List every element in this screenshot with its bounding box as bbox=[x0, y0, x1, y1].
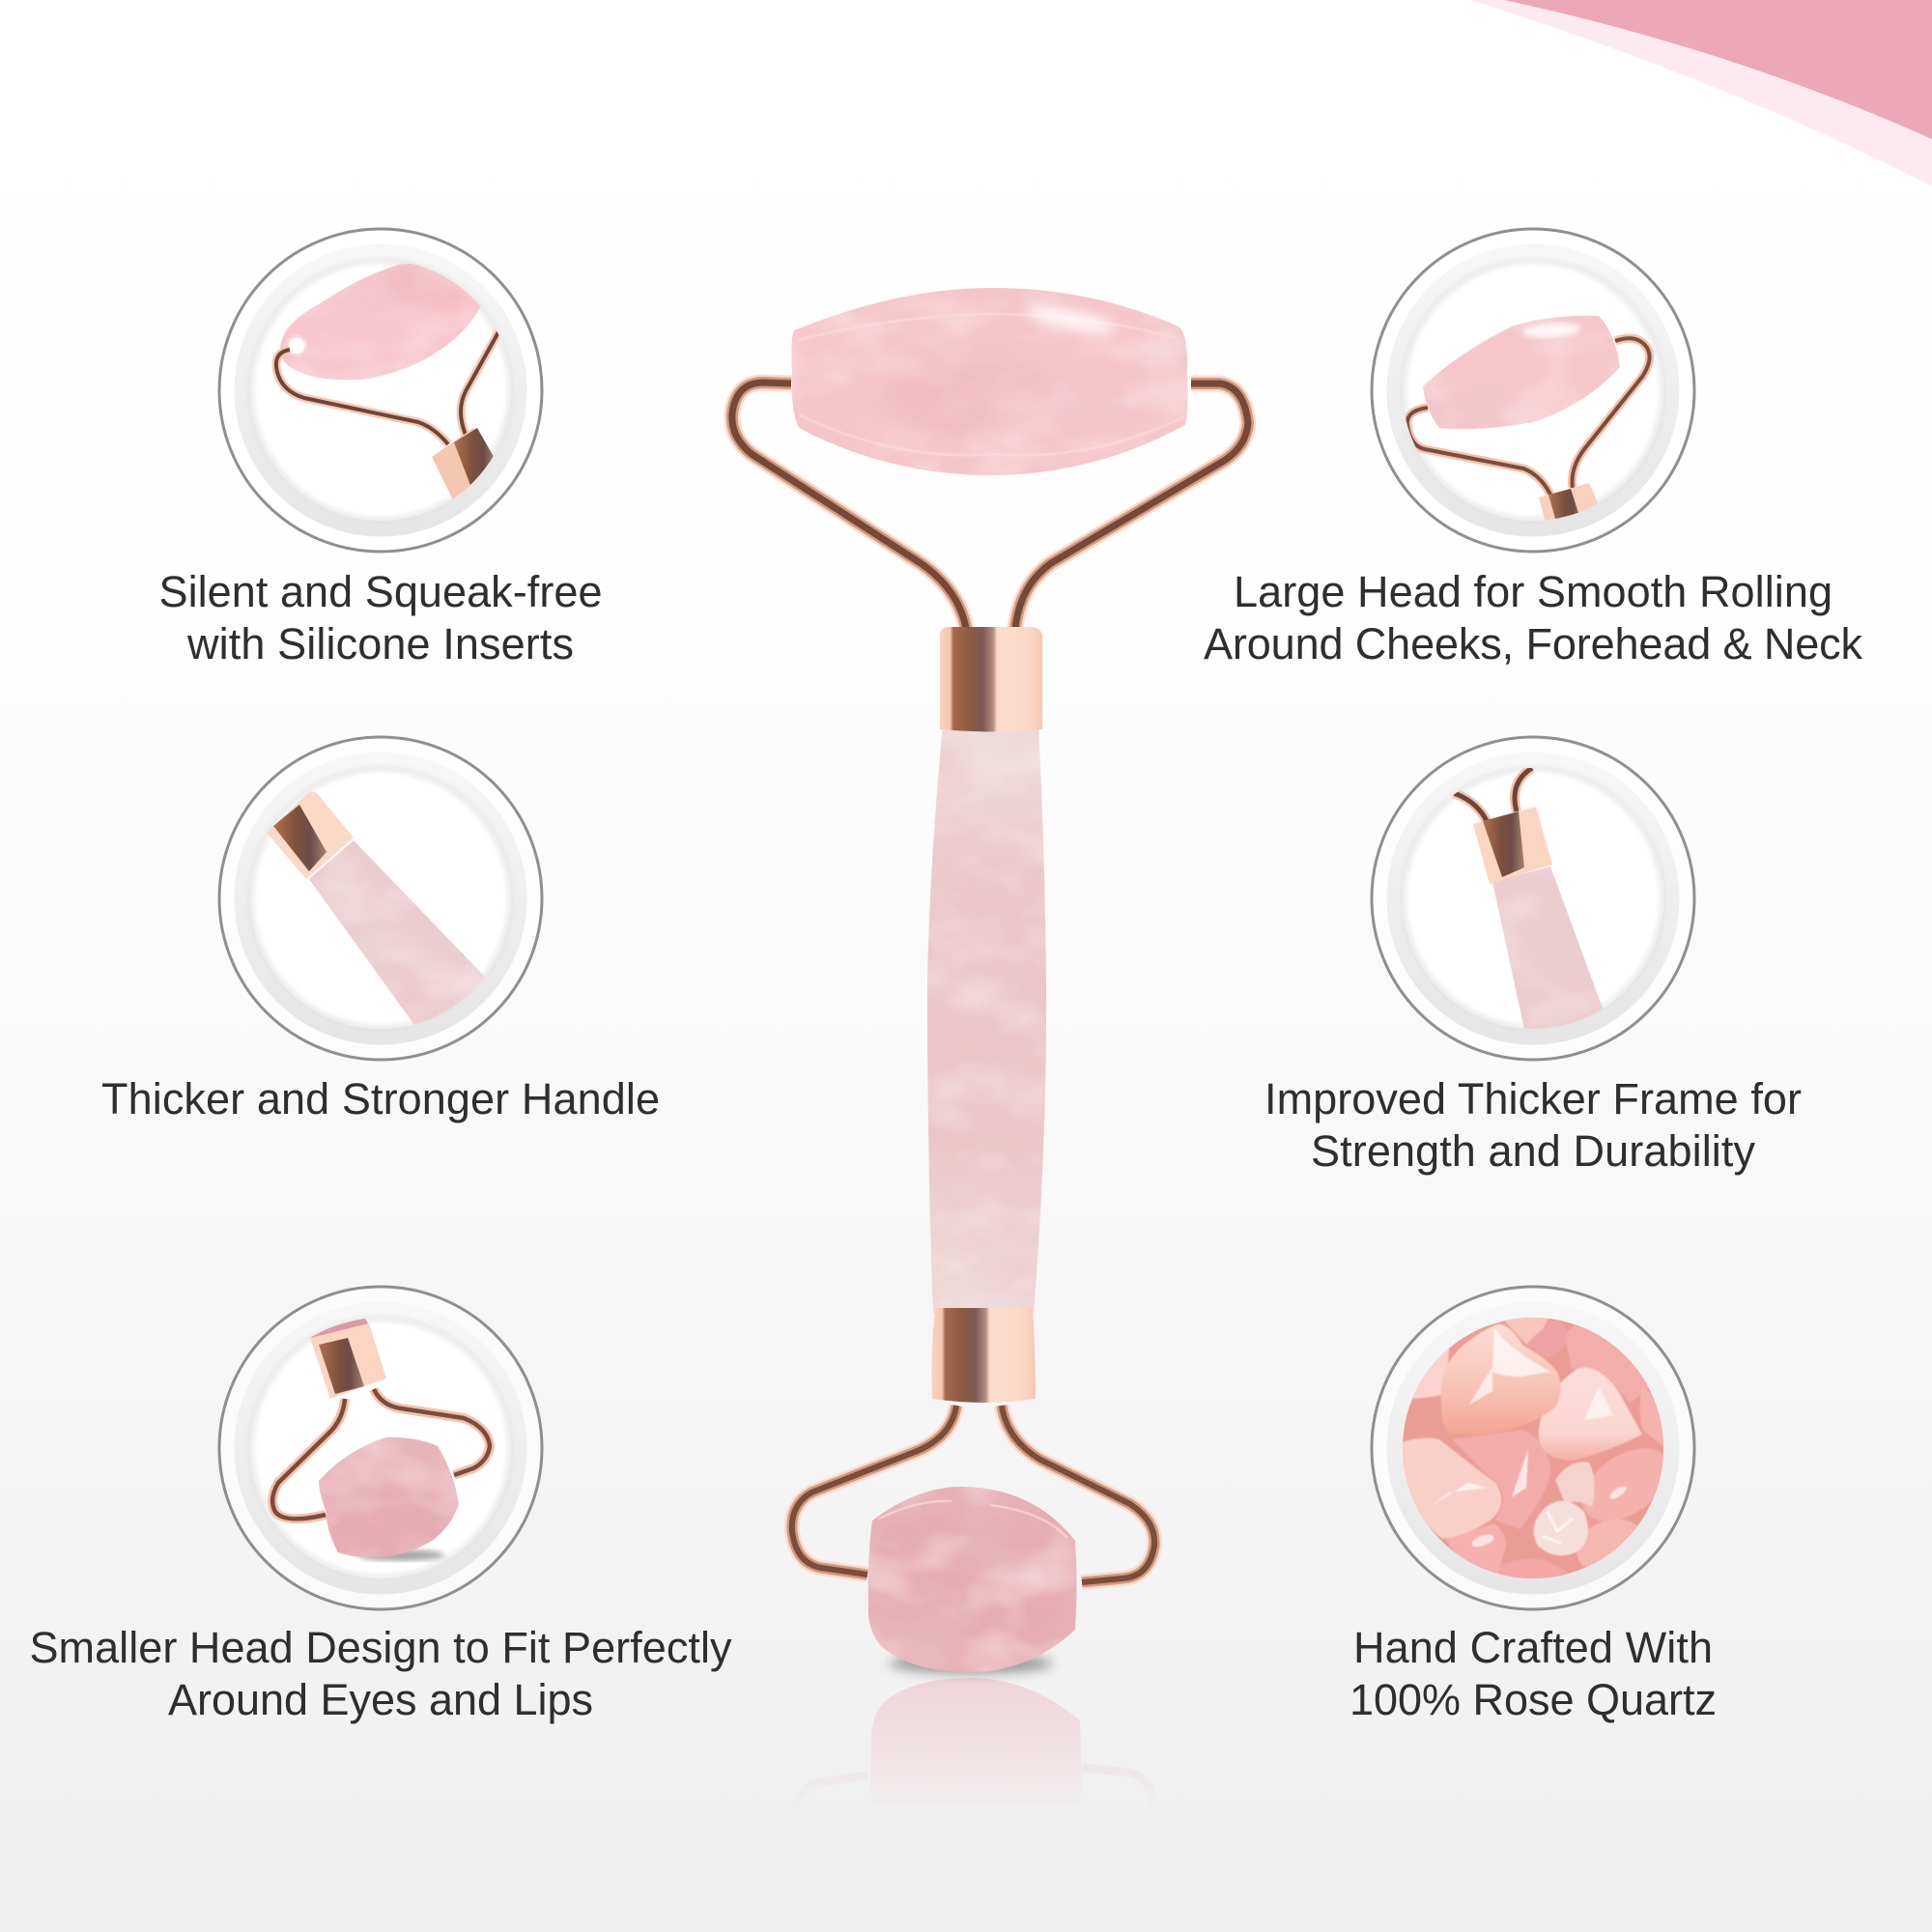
feature: thicker frame bbox=[1264, 737, 1802, 1176]
caption: Improved Thicker Frame for bbox=[1264, 1074, 1802, 1123]
caption: Hand Crafted With bbox=[1353, 1623, 1713, 1672]
handle bbox=[927, 724, 1046, 1314]
reflection of small head bbox=[854, 1678, 1142, 1783]
caption: Around Eyes and Lips bbox=[168, 1675, 593, 1724]
feature: large head bbox=[1204, 229, 1862, 668]
caption bbox=[158, 567, 603, 668]
close-up photo bbox=[268, 792, 485, 1024]
caption: with Silicone Inserts bbox=[186, 619, 574, 668]
caption: Strength and Durability bbox=[1311, 1126, 1756, 1176]
corner swoosh bbox=[1471, 0, 1932, 186]
main product: rose quartz roller bbox=[732, 288, 1248, 1932]
caption: Thicker and Stronger Handle bbox=[101, 1074, 660, 1123]
circle badge bbox=[1372, 1287, 1694, 1609]
caption bbox=[1264, 1074, 1802, 1176]
contact shadow bbox=[889, 1654, 1053, 1673]
large roller head bbox=[791, 288, 1188, 475]
feature: silicone inserts bbox=[158, 229, 603, 668]
feature: thicker handle bbox=[101, 737, 660, 1123]
circle badge bbox=[1372, 229, 1694, 552]
rose quartz stones photo bbox=[1403, 1318, 1663, 1578]
caption bbox=[1204, 567, 1862, 668]
close-up photo bbox=[1407, 316, 1650, 541]
feature: rose quartz stones bbox=[1350, 1287, 1717, 1724]
small roller frame bbox=[792, 1406, 1154, 1582]
close-up photo bbox=[272, 1319, 490, 1561]
caption bbox=[29, 1623, 732, 1724]
caption: Smaller Head Design to Fit Perfectly bbox=[29, 1623, 732, 1672]
caption bbox=[1350, 1623, 1717, 1724]
small roller head bbox=[868, 1487, 1076, 1672]
close-up photo bbox=[1454, 768, 1608, 1038]
feature: smaller head bbox=[29, 1287, 732, 1724]
circle badge bbox=[1372, 737, 1694, 1060]
caption: Around Cheeks, Forehead & Neck bbox=[1204, 619, 1862, 668]
upper metal collar bbox=[940, 627, 1042, 732]
close-up photo bbox=[271, 264, 500, 498]
circle badge bbox=[219, 229, 542, 552]
caption: 100% Rose Quartz bbox=[1350, 1675, 1717, 1724]
circle badge bbox=[219, 737, 542, 1060]
caption: Silent and Squeak-free bbox=[158, 567, 603, 616]
lower metal collar bbox=[931, 1308, 1036, 1403]
large roller frame bbox=[732, 383, 1248, 628]
circle badge bbox=[219, 1287, 542, 1609]
caption: Large Head for Smooth Rolling bbox=[1234, 567, 1833, 616]
